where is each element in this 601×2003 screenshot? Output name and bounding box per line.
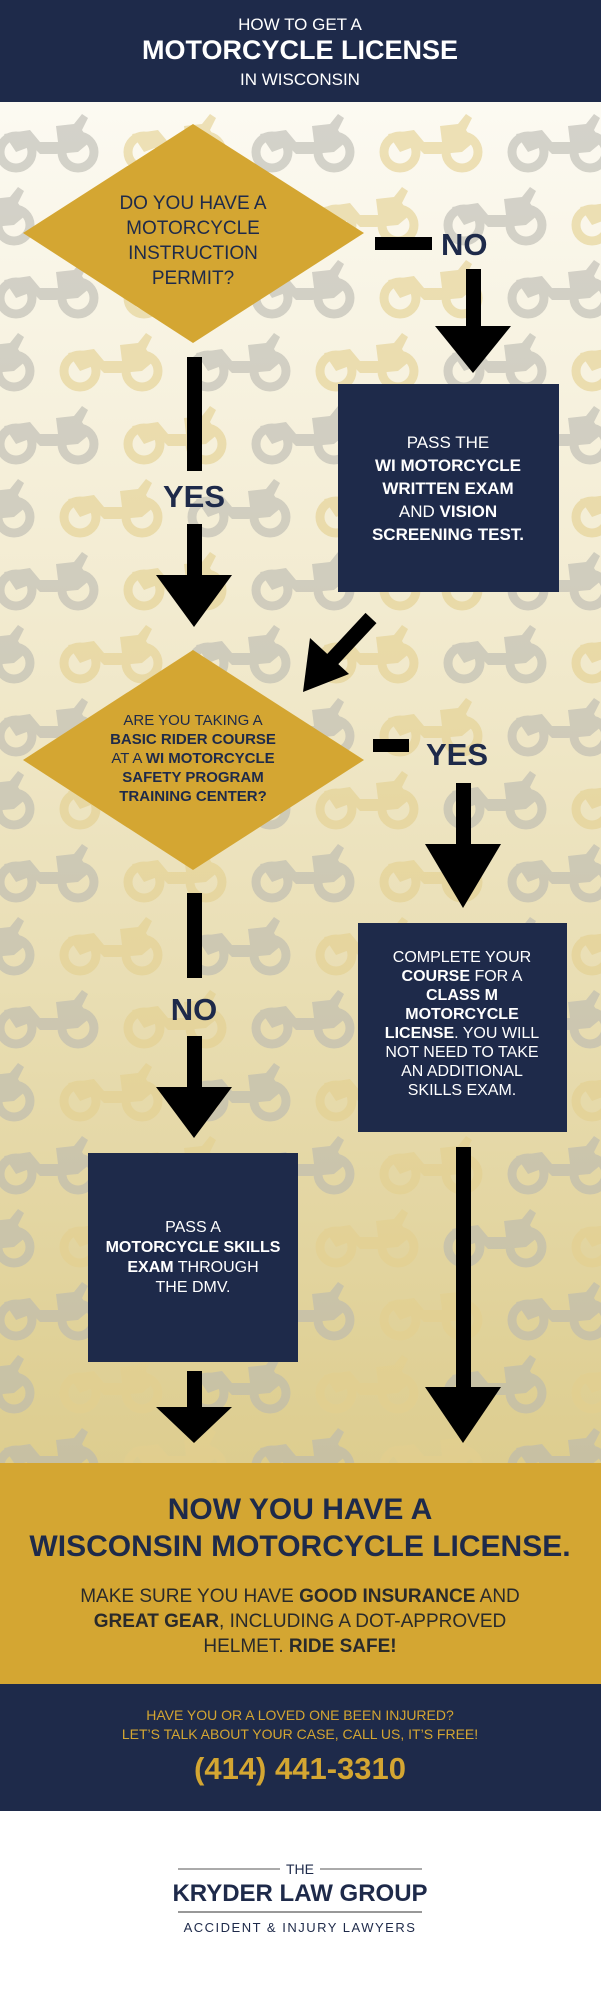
box: complete course: LICENSE. YOU WILL [385,1025,539,1042]
arrow: NO to skills exam: NO [171,992,217,1027]
header: MOTORCYCLE LICENSE [142,35,458,65]
logo: THE [286,1861,314,1877]
gold panel: result: NOW YOU HAVE A [168,1493,432,1526]
box: written exam: AND VISION [399,502,497,521]
box: complete course: COMPLETE YOUR [393,949,531,966]
arrow: YES branch [156,357,232,627]
arrow: YES branch: YES [163,479,225,514]
box: written exam: PASS THE [407,433,489,452]
arrow: right bottom [425,1147,501,1443]
box: written exam [338,384,559,592]
arrow: YES to course [373,737,501,908]
box: written exam: WI MOTORCYCLE [375,456,521,475]
box: complete course: CLASS M [426,987,498,1004]
box: skills exam: THE DMV. [156,1279,230,1296]
diamond: permit question: MOTORCYCLE [126,218,260,239]
logo [172,1861,428,1935]
gold panel: result [0,1463,601,1684]
diamond: permit question: INSTRUCTION [128,243,258,264]
gold panel: result: MAKE SURE YOU HAVE GOOD INSURANCE AND [80,1586,520,1607]
gold panel: result: GREAT GEAR, INCLUDING A DOT-APPROVED [94,1611,506,1632]
diamond: basic rider course: AT A WI MOTORCYCLE [111,750,275,767]
navy panel: call to action [0,1684,601,1811]
logo: KRYDER LAW GROUP [172,1880,428,1907]
diamond: permit question: DO YOU HAVE A [119,193,267,214]
box: complete course: NOT NEED TO TAKE [385,1044,539,1061]
box: skills exam [88,1153,298,1362]
box: skills exam: MOTORCYCLE SKILLS [106,1239,281,1256]
arrow: YES to course: YES [426,737,488,772]
header: IN WISCONSIN [240,70,360,89]
diamond: basic rider course: SAFETY PROGRAM [122,769,264,786]
diamond: basic rider course: TRAINING CENTER? [119,788,267,805]
arrow: NO to skills exam [156,893,232,1138]
box: complete course: SKILLS EXAM. [408,1082,516,1099]
navy panel: call to action: (414) 441-3310 [194,1751,406,1786]
box: written exam: SCREENING TEST. [372,525,524,544]
arrow: NO branch: NO [441,227,488,262]
gold panel: result: HELMET. RIDE SAFE! [203,1636,397,1657]
box: complete course [358,923,567,1132]
box: complete course: AN ADDITIONAL [401,1063,523,1080]
box: complete course: MOTORCYCLE [405,1006,519,1023]
box: skills exam: PASS A [165,1219,221,1236]
arrow: left bottom [156,1371,232,1443]
box: skills exam: EXAM THROUGH [127,1259,259,1276]
navy panel: call to action: HAVE YOU OR A LOVED ONE BEEN INJURED? [146,1707,454,1723]
header [0,0,601,102]
arrow: diagonal [303,618,371,692]
box: written exam: WRITTEN EXAM [382,479,514,498]
navy panel: call to action: LET’S TALK ABOUT YOUR CASE, CALL US, IT’S FREE! [122,1726,478,1742]
box: complete course: COURSE FOR A [402,968,523,985]
diamond: permit question [23,124,364,343]
header: HOW TO GET A [238,15,363,34]
background pattern [0,102,601,1464]
diamond: basic rider course: ARE YOU TAKING A [123,712,263,729]
diamond: permit question: PERMIT? [152,268,234,289]
logo: ACCIDENT & INJURY LAWYERS [184,1920,416,1935]
diamond: basic rider course: BASIC RIDER COURSE [110,731,276,748]
arrow: NO branch [375,227,511,373]
diamond: basic rider course [23,650,364,870]
gold panel: result: WISCONSIN MOTORCYCLE LICENSE. [29,1530,571,1563]
